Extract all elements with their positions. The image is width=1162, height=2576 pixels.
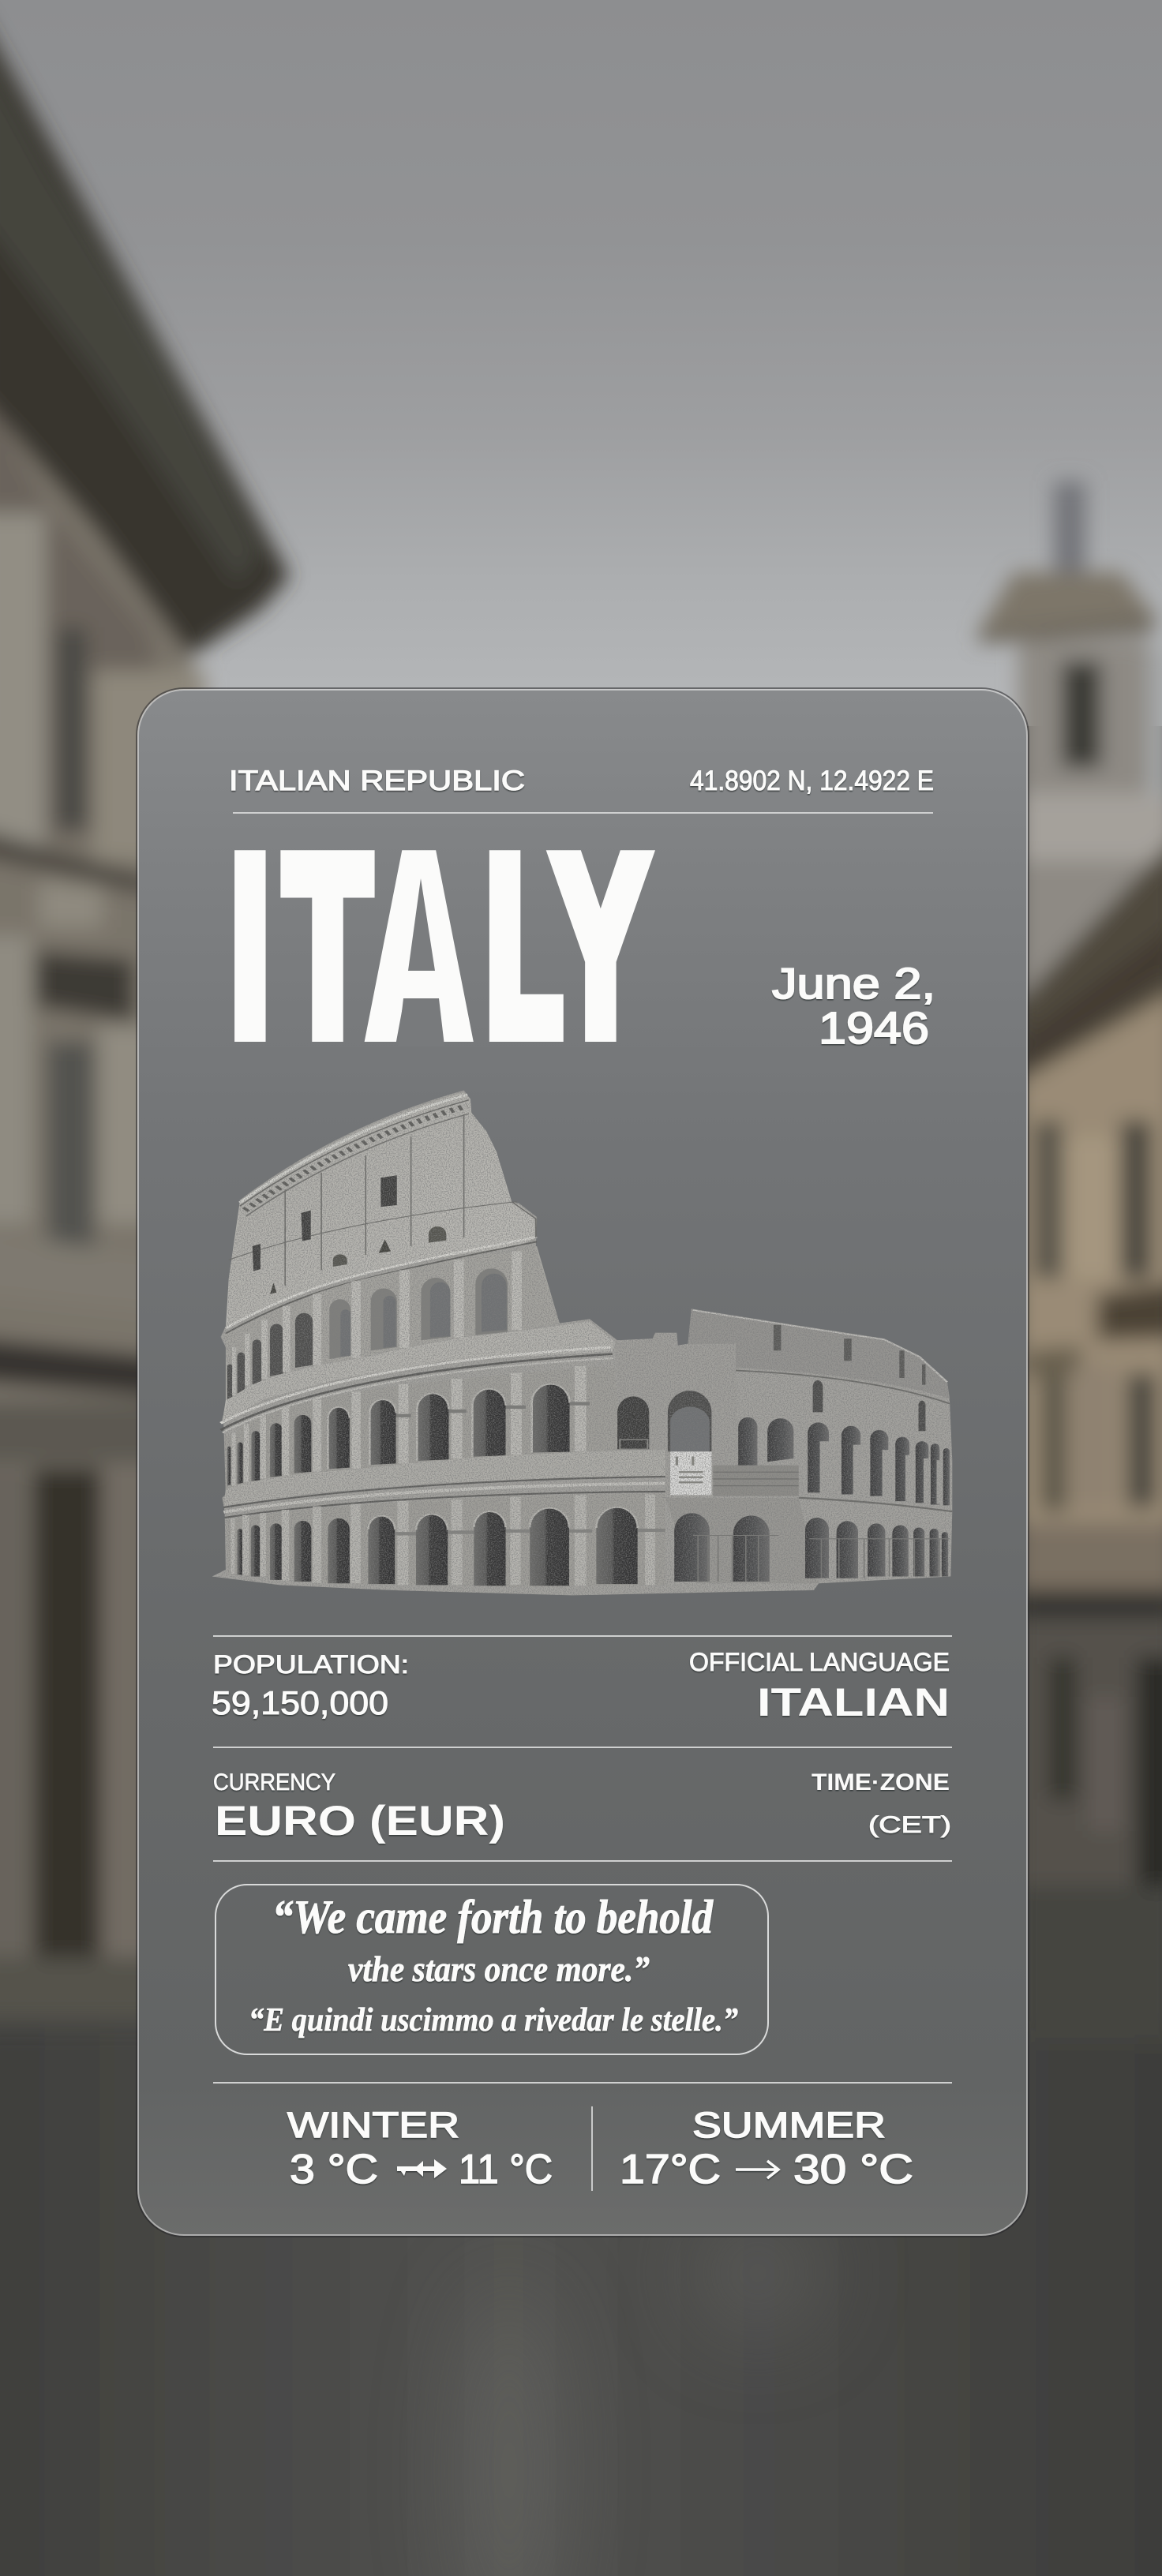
third tier <box>226 1246 560 1400</box>
founding date <box>772 959 935 1054</box>
stat: population: POPULATION: <box>213 1650 409 1679</box>
right building <box>1018 837 1162 1910</box>
stat: official language: ITALIAN <box>757 1680 950 1724</box>
stat: currency <box>213 1769 505 1844</box>
lower balustrade <box>223 1450 665 1518</box>
right tower <box>979 481 1162 1042</box>
upper balustrade <box>221 1321 615 1432</box>
climate: summer: SUMMER <box>692 2105 886 2145</box>
title: ITALY: ITALY <box>226 807 649 1094</box>
stat: population <box>212 1650 409 1721</box>
climate: summer: 17°C <box>620 2147 721 2192</box>
stat: official language <box>689 1648 950 1724</box>
founding date: 1946 <box>819 1003 929 1054</box>
right wing <box>665 1309 952 1583</box>
stat: official language: OFFICIAL LANGUAGE <box>689 1648 950 1676</box>
icon: winter arrow <box>397 2159 447 2178</box>
stone speckle <box>213 1085 955 1598</box>
stat: time zone <box>812 1769 951 1838</box>
coordinates: 41.8902 N, 12.4922 E <box>690 766 934 796</box>
panel: glass country card <box>137 688 1029 2237</box>
founding date: June 2, <box>772 959 935 1008</box>
stat: currency: CURRENCY <box>213 1769 335 1795</box>
road <box>0 2028 1162 2576</box>
stat: currency: EURO (EUR) <box>215 1798 505 1844</box>
middle section and open arch <box>615 1334 799 1496</box>
quote line 1: “We came forth to behold <box>272 1891 714 1943</box>
stat: population: 59,150,000 <box>212 1684 388 1721</box>
left building <box>0 9 290 2020</box>
header row <box>229 766 934 796</box>
climate: winter <box>287 2105 553 2192</box>
ground tier <box>227 1494 665 1587</box>
climate: summer: 30 °C <box>793 2147 913 2192</box>
icon: summer arrow <box>736 2161 778 2178</box>
callout: quote box <box>216 1885 768 2054</box>
illustration: Colosseum <box>212 1085 955 1598</box>
climate: summer <box>620 2105 913 2192</box>
climate: winter: 11 °C <box>459 2147 553 2192</box>
second tier <box>225 1366 623 1489</box>
climate divider <box>591 2106 593 2191</box>
stat: time zone: TIME·ZONE <box>812 1769 950 1795</box>
country formal name: ITALIAN REPUBLIC <box>229 766 525 796</box>
stat: time zone: (CET) <box>868 1812 951 1838</box>
climate: winter: 3 °C <box>290 2147 378 2192</box>
quote line 2: vthe stars once more.” <box>348 1949 650 1989</box>
upper attic wall <box>226 1092 537 1334</box>
quote line 3: “E quindi uscimmo a rivedar le stelle.” <box>249 2002 738 2039</box>
climate: winter: WINTER <box>287 2105 459 2145</box>
